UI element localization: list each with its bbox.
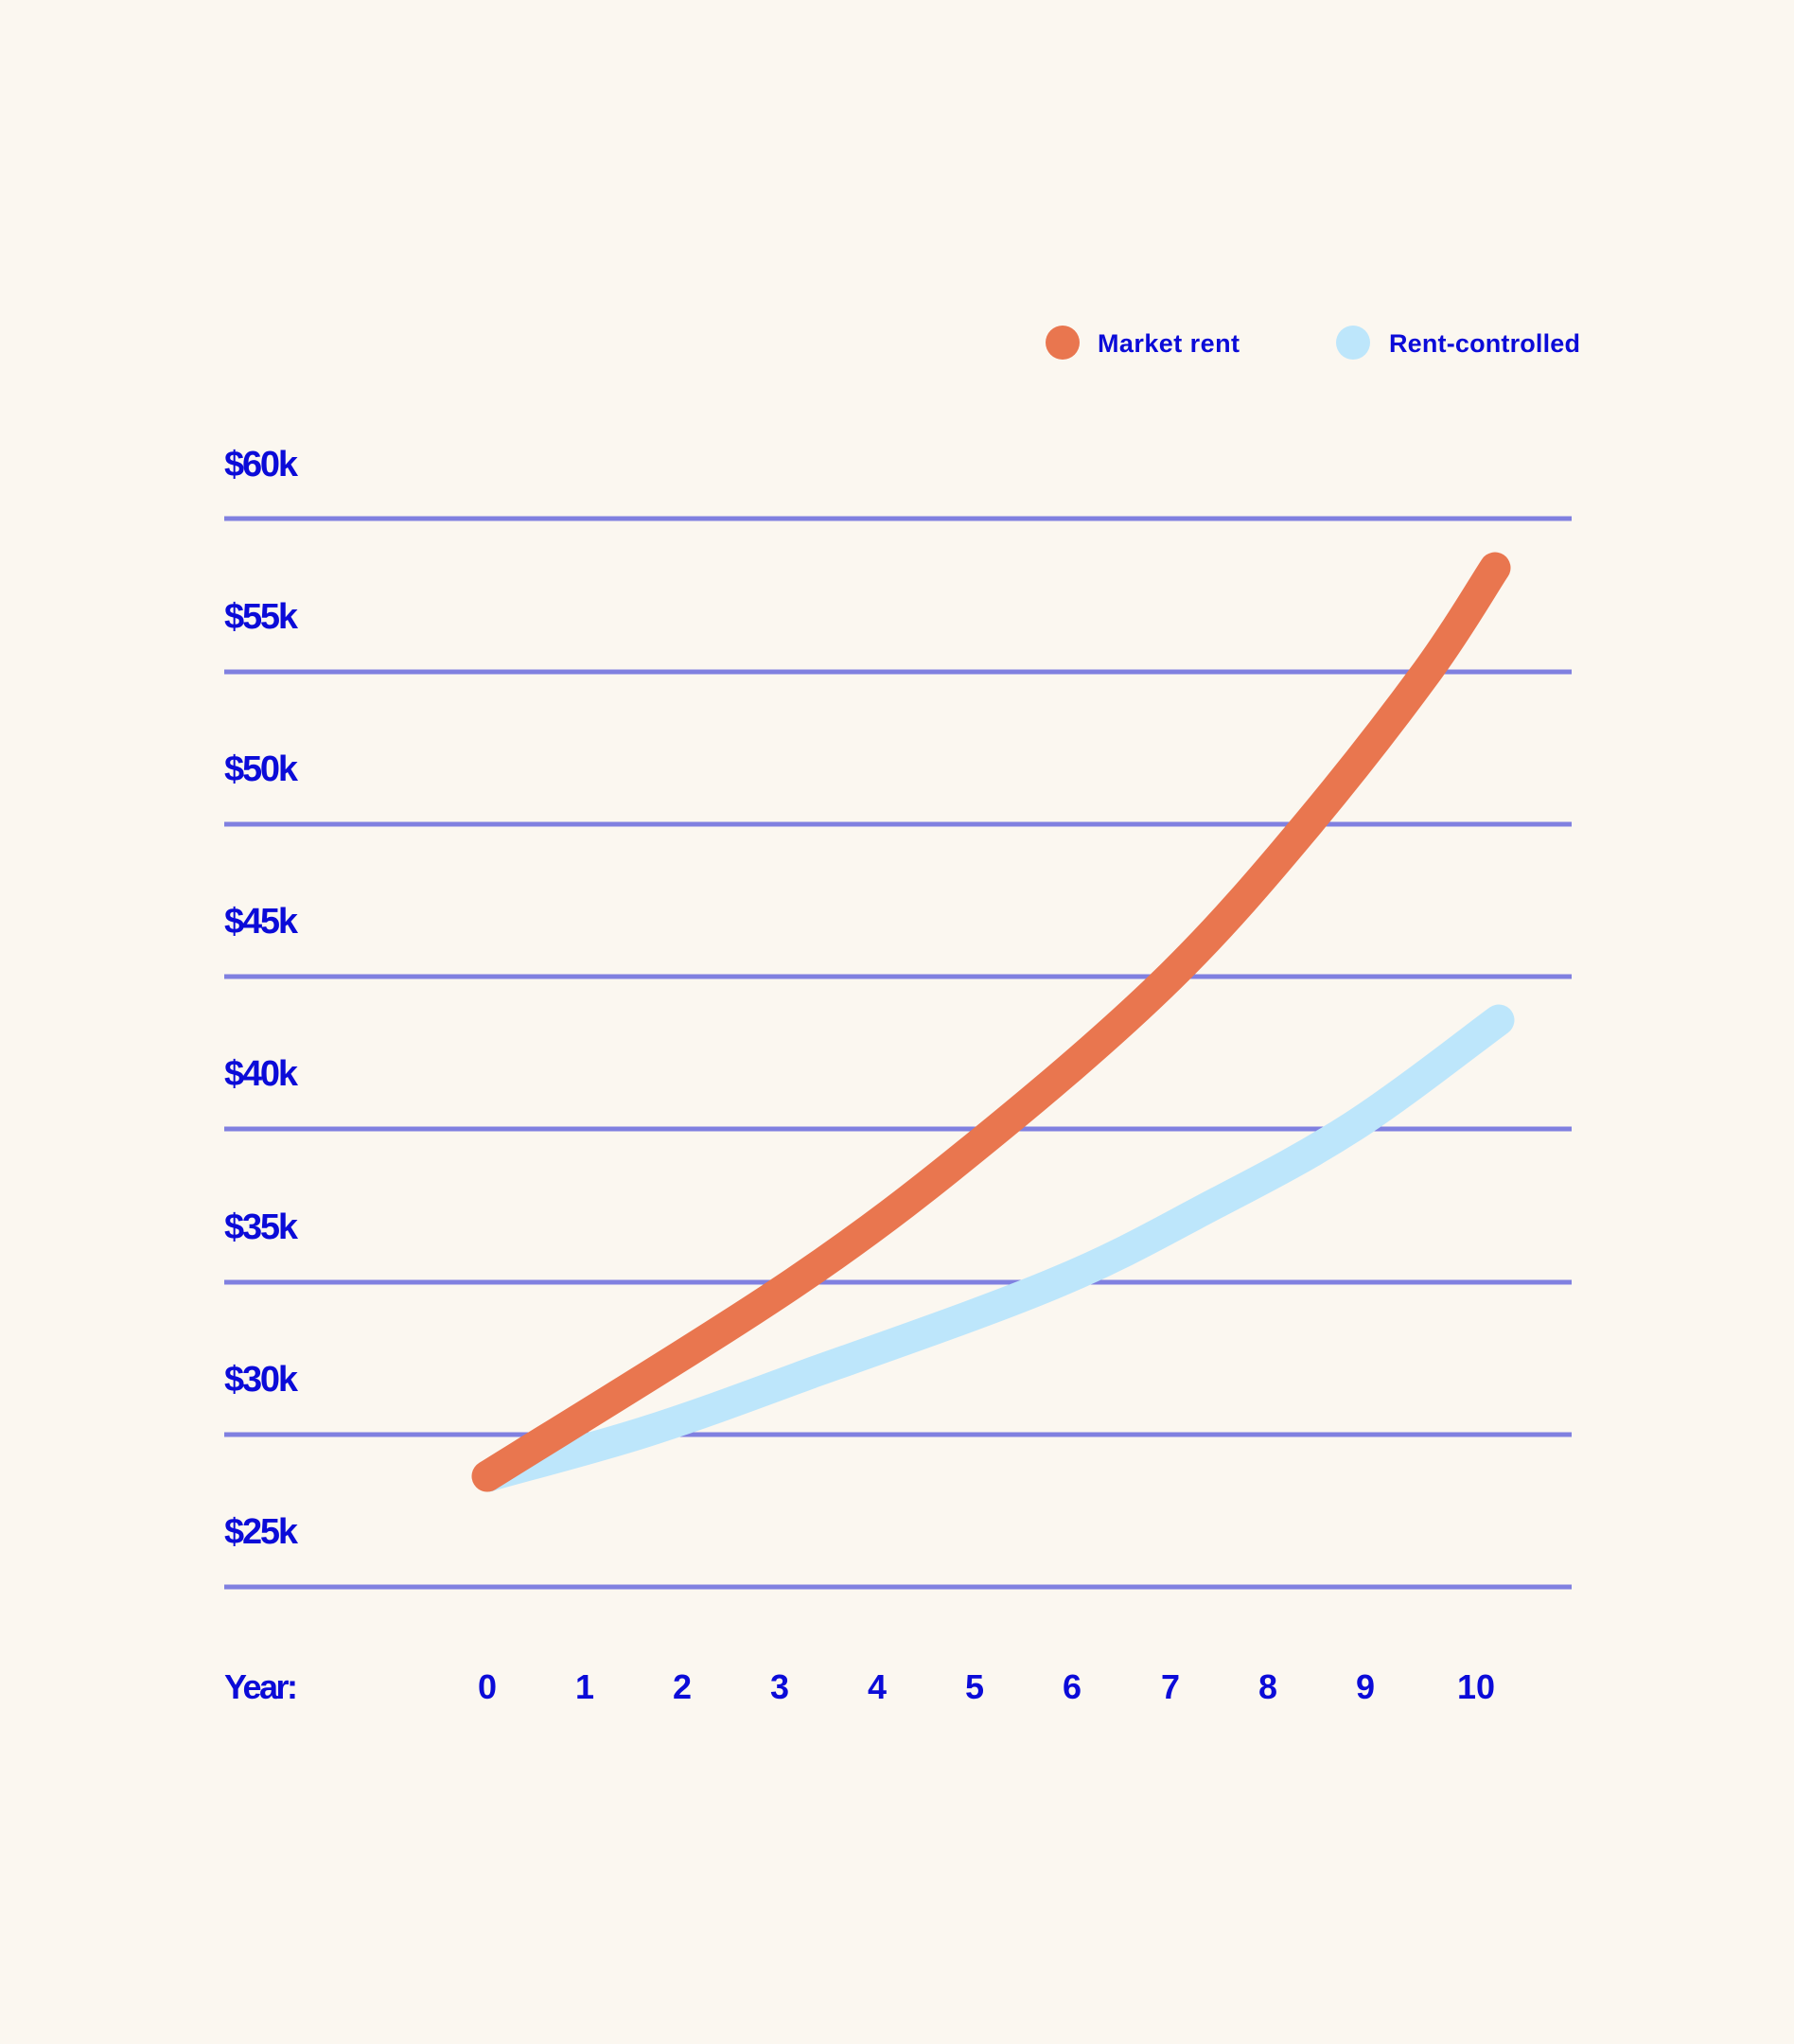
x-axis labels: 3 — [770, 1667, 789, 1706]
x-axis labels: 0 — [478, 1667, 497, 1706]
x-axis labels: 9 — [1356, 1667, 1375, 1706]
gridlines — [224, 519, 1572, 1587]
legend: market rent: Market rent — [1098, 329, 1240, 358]
x-axis labels: 6 — [1063, 1667, 1082, 1706]
x-axis labels — [224, 1667, 1495, 1706]
x-axis labels: 10 — [1457, 1667, 1495, 1706]
y-axis labels: $45k — [224, 902, 299, 942]
legend: rent-controlled: Rent-controlled — [1389, 329, 1580, 358]
x-axis labels: 4 — [868, 1667, 887, 1706]
legend: market rent — [1046, 326, 1240, 360]
x-axis labels: 1 — [575, 1667, 594, 1706]
x-axis labels: 5 — [965, 1667, 984, 1706]
y-axis labels: $35k — [224, 1207, 299, 1247]
y-axis labels: $30k — [224, 1360, 299, 1400]
y-axis labels: $55k — [224, 597, 299, 637]
y-axis labels — [224, 445, 299, 1552]
y-axis labels: $25k — [224, 1512, 299, 1552]
legend: rent-controlled — [1336, 326, 1580, 360]
x-axis labels: 2 — [673, 1667, 692, 1706]
x-axis labels: 7 — [1161, 1667, 1180, 1706]
x-axis labels: Year: — [224, 1667, 298, 1706]
y-axis labels: $40k — [224, 1054, 299, 1094]
x-axis labels: 8 — [1258, 1667, 1277, 1706]
legend — [1046, 326, 1580, 360]
line: rent-controlled — [488, 1020, 1499, 1476]
y-axis labels: $60k — [224, 445, 299, 485]
y-axis labels: $50k — [224, 749, 299, 789]
line: market rent — [487, 568, 1495, 1476]
